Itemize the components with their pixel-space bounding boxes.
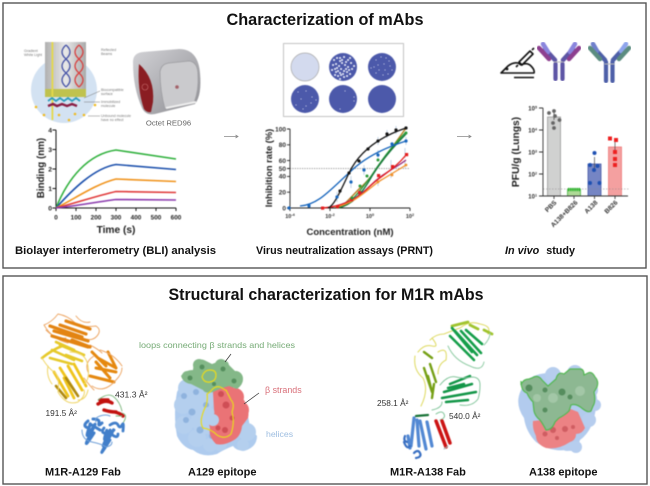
bar chart: viral titre in lungs: 2 [535, 172, 537, 176]
line chart: BLI binding curves: 600 [171, 214, 182, 222]
BLI biosensor diagram: Unbound molecule [101, 114, 131, 118]
line chart: inhibition rate: 60 [279, 158, 286, 165]
BLI biosensor diagram: Beams [101, 52, 112, 56]
surface model: A138 epitope [518, 365, 601, 453]
BLI biosensor diagram: molecule [101, 104, 115, 108]
bar chart: viral titre in lungs: PBS [544, 199, 559, 214]
BLI biosensor diagram: have no effect [101, 118, 124, 122]
line chart: inhibition rate: 100 [275, 126, 286, 133]
caption: BLI analysis: Biolayer interferometry (BLI) analysis [15, 245, 216, 257]
line chart: inhibition rate: -4 [291, 213, 296, 217]
label: helices: helices [266, 429, 294, 439]
line chart: inhibition rate: 2 [412, 213, 414, 217]
caption: A138 epitope: A138 epitope [529, 466, 597, 478]
line chart: BLI binding curves: 4 [48, 128, 52, 134]
bar chart: viral titre in lungs: 4 [535, 128, 538, 132]
line chart: BLI binding curves: 200 [91, 214, 102, 222]
pointer: beta strands [244, 393, 259, 404]
line chart: inhibition rate: 10 [325, 214, 331, 220]
line chart: inhibition rate: 40 [279, 174, 286, 181]
line chart: BLI binding curves: 1 [48, 186, 52, 193]
bar chart: viral titre in lungs [511, 106, 630, 229]
bar chart: viral titre in lungs: 5 [535, 106, 537, 110]
line chart: inhibition rate: 20 [279, 190, 286, 196]
line chart: BLI binding curves: 300 [111, 214, 122, 222]
bar chart: viral titre in lungs: A138+B826 [550, 199, 580, 229]
bar chart: viral titre in lungs: 10 [528, 194, 535, 200]
icon: mouse with syringe [501, 48, 534, 78]
label: 191.5 square angstroms: 191.5 Å² [46, 408, 77, 418]
bar chart: viral titre in lungs: 10 [528, 172, 535, 178]
line chart: inhibition rate: -2 [331, 213, 335, 217]
caption: M1R-A138 Fab: M1R-A138 Fab [390, 466, 466, 478]
heading: structural characterization: Structural characterization for M1R mAbs [168, 285, 484, 304]
line chart: BLI binding curves: 500 [151, 214, 162, 222]
plaque assay plate [284, 44, 404, 116]
caption: M1R-A129 Fab: M1R-A129 Fab [45, 466, 121, 478]
caption: PRNT: Virus neutralization assays (PRNT) [256, 245, 433, 257]
line chart: inhibition rate: 0 [282, 205, 286, 212]
line chart: inhibition rate: 10 [285, 214, 291, 220]
line chart: inhibition rate: 0 [372, 213, 374, 217]
caption: in vivo study: In vivo study [505, 245, 575, 257]
line chart: inhibition rate: 10 [366, 214, 372, 220]
BLI biosensor diagram [24, 42, 131, 123]
surface model: A129 epitope [174, 359, 257, 455]
label: Octet RED96: Octet RED96 [146, 118, 191, 128]
line chart: BLI binding curves: 2 [48, 166, 52, 174]
arrow: PRNT to in vivo [457, 135, 471, 138]
BLI biosensor diagram: Biocompatible [101, 88, 124, 92]
line chart: BLI binding curves: Time (s) [97, 225, 135, 236]
line chart: BLI binding curves: 3 [48, 147, 52, 154]
line chart: inhibition rate [264, 126, 414, 238]
bar chart: viral titre in lungs: 3 [535, 150, 537, 154]
line chart: BLI binding curves: 0 [48, 206, 52, 212]
BLI biosensor diagram: Reflected [101, 48, 116, 52]
ribbon structure: M1R-A138 Fab [404, 322, 492, 458]
bar chart: viral titre in lungs: 10 [528, 150, 535, 156]
heading: characterization of mAbs: Characterization of mAbs [226, 10, 424, 29]
caption: A129 epitope: A129 epitope [188, 466, 256, 478]
BLI biosensor diagram: Immobilized [101, 100, 120, 104]
pointer: loops [225, 354, 231, 362]
ribbon structure: M1R-A129 Fab [42, 314, 126, 453]
line chart: BLI binding curves: 0 [54, 214, 58, 222]
icon: antibody purple [539, 44, 579, 79]
bar chart: viral titre in lungs: 10 [528, 106, 535, 112]
panel: structural characterization [3, 276, 647, 484]
BLI biosensor diagram: White Light [24, 53, 42, 57]
icon: antibody teal [590, 44, 629, 81]
bar chart: viral titre in lungs: 10 [528, 128, 535, 134]
bar chart: viral titre in lungs: PFU/g (Lungs) [511, 117, 522, 187]
line chart: inhibition rate: Inhibition rate (%) [264, 129, 274, 207]
BLI biosensor diagram: Gradient [24, 49, 38, 53]
line chart: BLI binding curves: 400 [131, 214, 142, 222]
line chart: inhibition rate: Concentration (nM) [306, 227, 394, 238]
line chart: BLI binding curves: Binding (nm) [36, 138, 47, 198]
arrow: BLI to PRNT [224, 135, 238, 138]
label: beta strands: β strands [265, 385, 302, 395]
panel: characterization of mAbs [3, 3, 646, 268]
instrument: Octet RED96 [133, 49, 200, 114]
bar chart: viral titre in lungs: B826 [603, 199, 620, 215]
line chart: inhibition rate: 80 [279, 142, 286, 149]
label: loops: loops connecting β strands and helices [139, 340, 295, 350]
line chart: BLI binding curves: 100 [71, 214, 82, 222]
line chart: inhibition rate: 10 [406, 214, 412, 220]
label: 258.1 square angstroms: 258.1 Å² [377, 398, 409, 408]
label: 431.3 square angstroms: 431.3 Å² [115, 390, 148, 400]
line chart: BLI binding curves [36, 128, 182, 236]
label: 540.0 square angstroms: 540.0 Å² [449, 411, 481, 421]
BLI biosensor diagram: surface [101, 92, 113, 96]
bar chart: viral titre in lungs: 1 [535, 194, 537, 198]
line chart: inhibition rate: 50 [279, 166, 286, 173]
bar chart: viral titre in lungs: A138 [583, 199, 600, 215]
